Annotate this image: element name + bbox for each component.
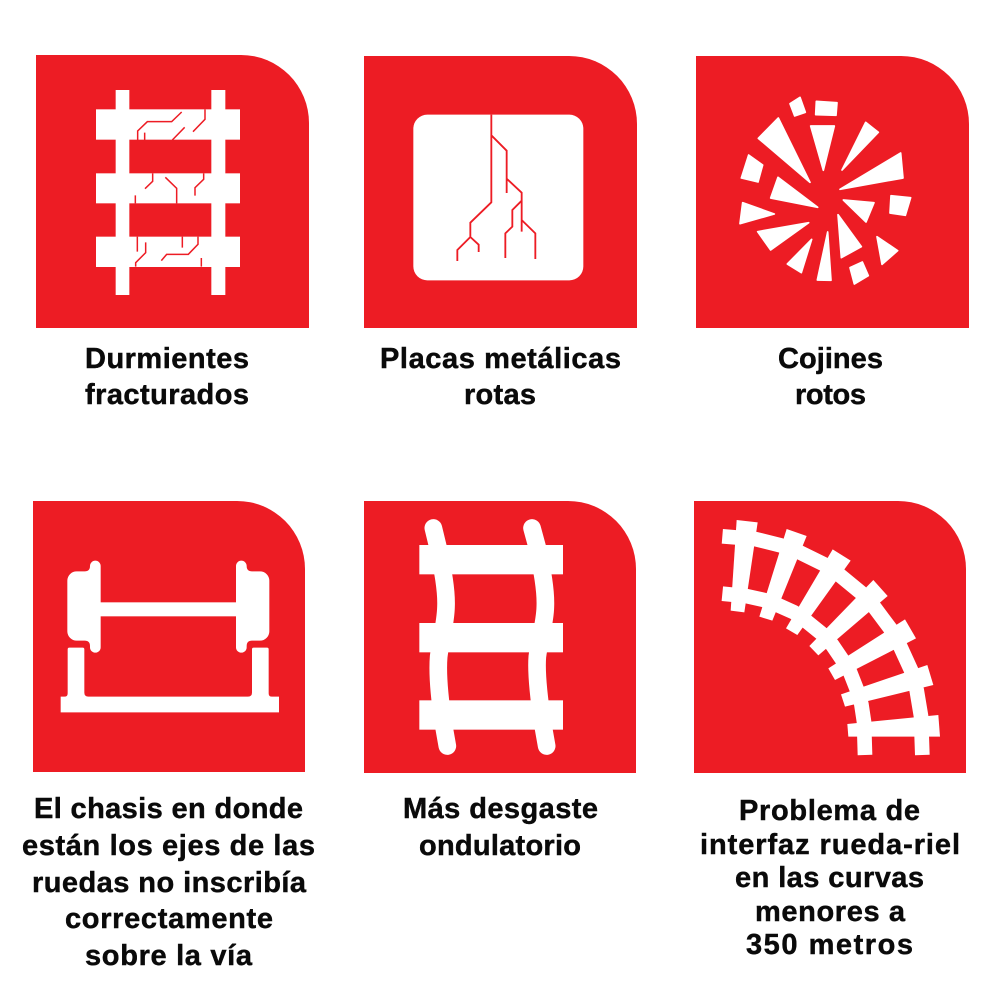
label 5: Más desgaste	[403, 793, 598, 825]
icon: cracked plate	[413, 115, 583, 280]
panel: desgaste ondulatorio	[364, 501, 636, 862]
label 6: Problema de	[739, 795, 920, 827]
panel: placas metálicas rotas	[364, 56, 637, 411]
label 3: Cojines	[778, 343, 883, 375]
red tile 1	[36, 55, 309, 328]
icon: wavy rails	[419, 528, 563, 746]
panel: chasis	[22, 501, 315, 972]
label 1: fracturados	[85, 379, 249, 411]
label 4: correctamente	[65, 903, 273, 935]
label 6: en las curvas	[735, 862, 924, 894]
label 2: Placas metálicas	[380, 343, 621, 375]
label 2	[380, 343, 621, 411]
label 1: Durmientes	[85, 343, 249, 375]
red tile 5	[364, 501, 636, 773]
label 4: El chasis en donde	[34, 793, 303, 825]
label 4	[22, 793, 315, 972]
label 4: ruedas no inscribía	[32, 867, 307, 899]
label 6	[700, 795, 960, 961]
red tile 2	[364, 56, 637, 328]
label 5: ondulatorio	[419, 830, 581, 862]
panel: durmientes fracturados	[36, 55, 309, 411]
label 6: interfaz rueda-riel	[700, 829, 960, 861]
label 4: sobre la vía	[85, 940, 253, 972]
icon: curved track	[722, 520, 940, 755]
label 4: están los ejes de las	[22, 830, 315, 862]
label 6: 350 metros	[746, 929, 913, 961]
label 6: menores a	[755, 896, 906, 928]
label 2: rotas	[464, 379, 536, 411]
label 5	[403, 793, 598, 862]
label 3	[778, 343, 883, 411]
label 1	[85, 343, 249, 411]
red tile 3	[696, 56, 969, 328]
red tile 4	[33, 501, 305, 772]
red tile 6	[694, 501, 966, 773]
icon: fractured sleepers	[96, 90, 240, 295]
icon: wheelset over chassis	[61, 561, 279, 712]
panel: cojines rotos	[696, 56, 969, 411]
label 3: rotos	[795, 379, 866, 411]
panel: interfaz rueda-riel	[694, 501, 966, 961]
icon: shattered pad	[740, 97, 911, 284]
